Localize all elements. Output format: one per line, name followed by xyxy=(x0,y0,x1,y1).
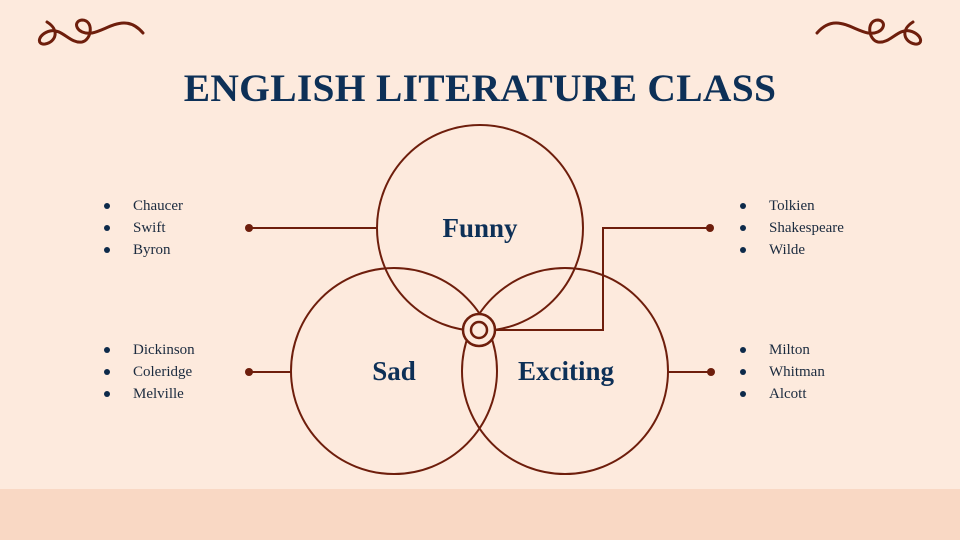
list: exciting xyxy=(740,342,825,402)
title: ENGLISH LITERATURE CLASS xyxy=(184,66,776,110)
circle: exciting xyxy=(462,268,668,474)
list: funny: Swift xyxy=(133,220,166,236)
dots xyxy=(245,224,715,376)
list: top right: Wilde xyxy=(769,242,805,258)
list: top right xyxy=(740,198,844,258)
labels xyxy=(372,213,614,386)
connector: top left xyxy=(249,227,377,229)
list: sad xyxy=(104,342,195,402)
labels: Exciting xyxy=(518,356,614,386)
connector: sad xyxy=(249,371,291,373)
labels: Funny xyxy=(442,213,518,243)
list: sad: Melville xyxy=(133,386,184,402)
connector: center to top right xyxy=(496,228,710,330)
labels: Sad xyxy=(372,356,416,386)
center ring xyxy=(463,314,495,346)
list: top right: Tolkien xyxy=(769,198,815,214)
list: sad: Coleridge xyxy=(133,364,192,380)
list: funny: Byron xyxy=(133,242,170,258)
list: sad: Dickinson xyxy=(133,342,195,358)
list: funny: Chaucer xyxy=(133,198,183,214)
list: funny xyxy=(104,198,183,258)
decoration: left flourish xyxy=(38,18,145,46)
list: exciting: Milton xyxy=(769,342,810,358)
bottom band xyxy=(0,489,960,540)
list: exciting: Alcott xyxy=(769,386,806,402)
decoration: right flourish xyxy=(815,18,922,46)
connector: exciting xyxy=(668,371,711,373)
list: top right: Shakespeare xyxy=(769,220,844,236)
circle: sad xyxy=(291,268,497,474)
list: exciting: Whitman xyxy=(769,364,825,380)
circle: funny xyxy=(377,125,583,331)
